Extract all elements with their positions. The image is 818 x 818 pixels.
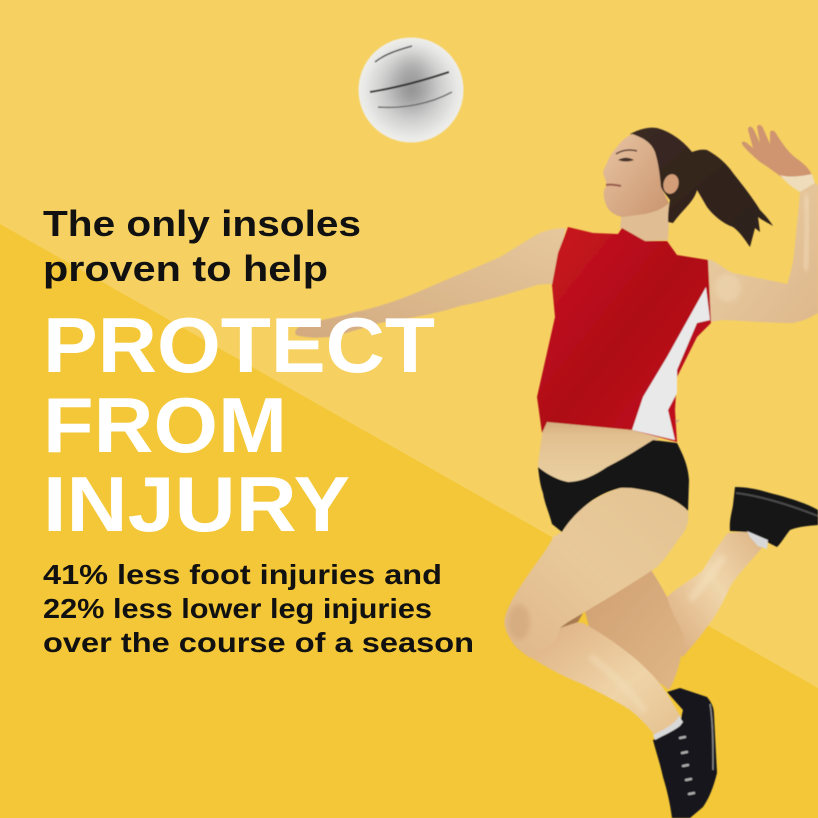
upper shoe bbox=[730, 487, 818, 547]
ponytail and hair bbox=[630, 128, 773, 247]
black shorts bbox=[538, 440, 689, 532]
headline bbox=[43, 301, 435, 548]
text: intro heading bbox=[43, 203, 361, 289]
headline: FROM bbox=[43, 381, 287, 469]
headline: INJURY bbox=[43, 460, 350, 548]
text: intro heading: The only insoles bbox=[43, 203, 361, 244]
text: statistics: 41% less foot injuries and bbox=[43, 559, 442, 590]
front lower leg bbox=[530, 620, 682, 736]
lower shoe bbox=[653, 688, 717, 818]
eye, brow and mouth bbox=[606, 150, 637, 186]
icon: volleyball bbox=[358, 38, 464, 142]
text: intro heading: proven to help bbox=[43, 248, 328, 289]
back thigh bbox=[585, 568, 684, 690]
white jersey panel bbox=[632, 287, 710, 440]
raised arm, left bbox=[295, 228, 566, 338]
belly bbox=[538, 410, 680, 482]
lower sock bbox=[653, 716, 683, 740]
headline: PROTECT bbox=[43, 301, 435, 389]
upper sock bbox=[747, 531, 768, 549]
front thigh bbox=[504, 487, 688, 658]
back lower leg bbox=[667, 531, 762, 657]
hand bbox=[742, 125, 812, 190]
ear bbox=[661, 172, 681, 196]
text: statistics: over the course of a season bbox=[43, 627, 474, 658]
text: statistics bbox=[43, 559, 474, 658]
text: statistics: 22% less lower leg injuries bbox=[43, 593, 432, 624]
neck bbox=[620, 203, 670, 241]
athlete figure bbox=[295, 125, 818, 818]
right arm bbox=[708, 183, 818, 323]
jersey bbox=[537, 227, 711, 442]
face bbox=[603, 134, 669, 217]
